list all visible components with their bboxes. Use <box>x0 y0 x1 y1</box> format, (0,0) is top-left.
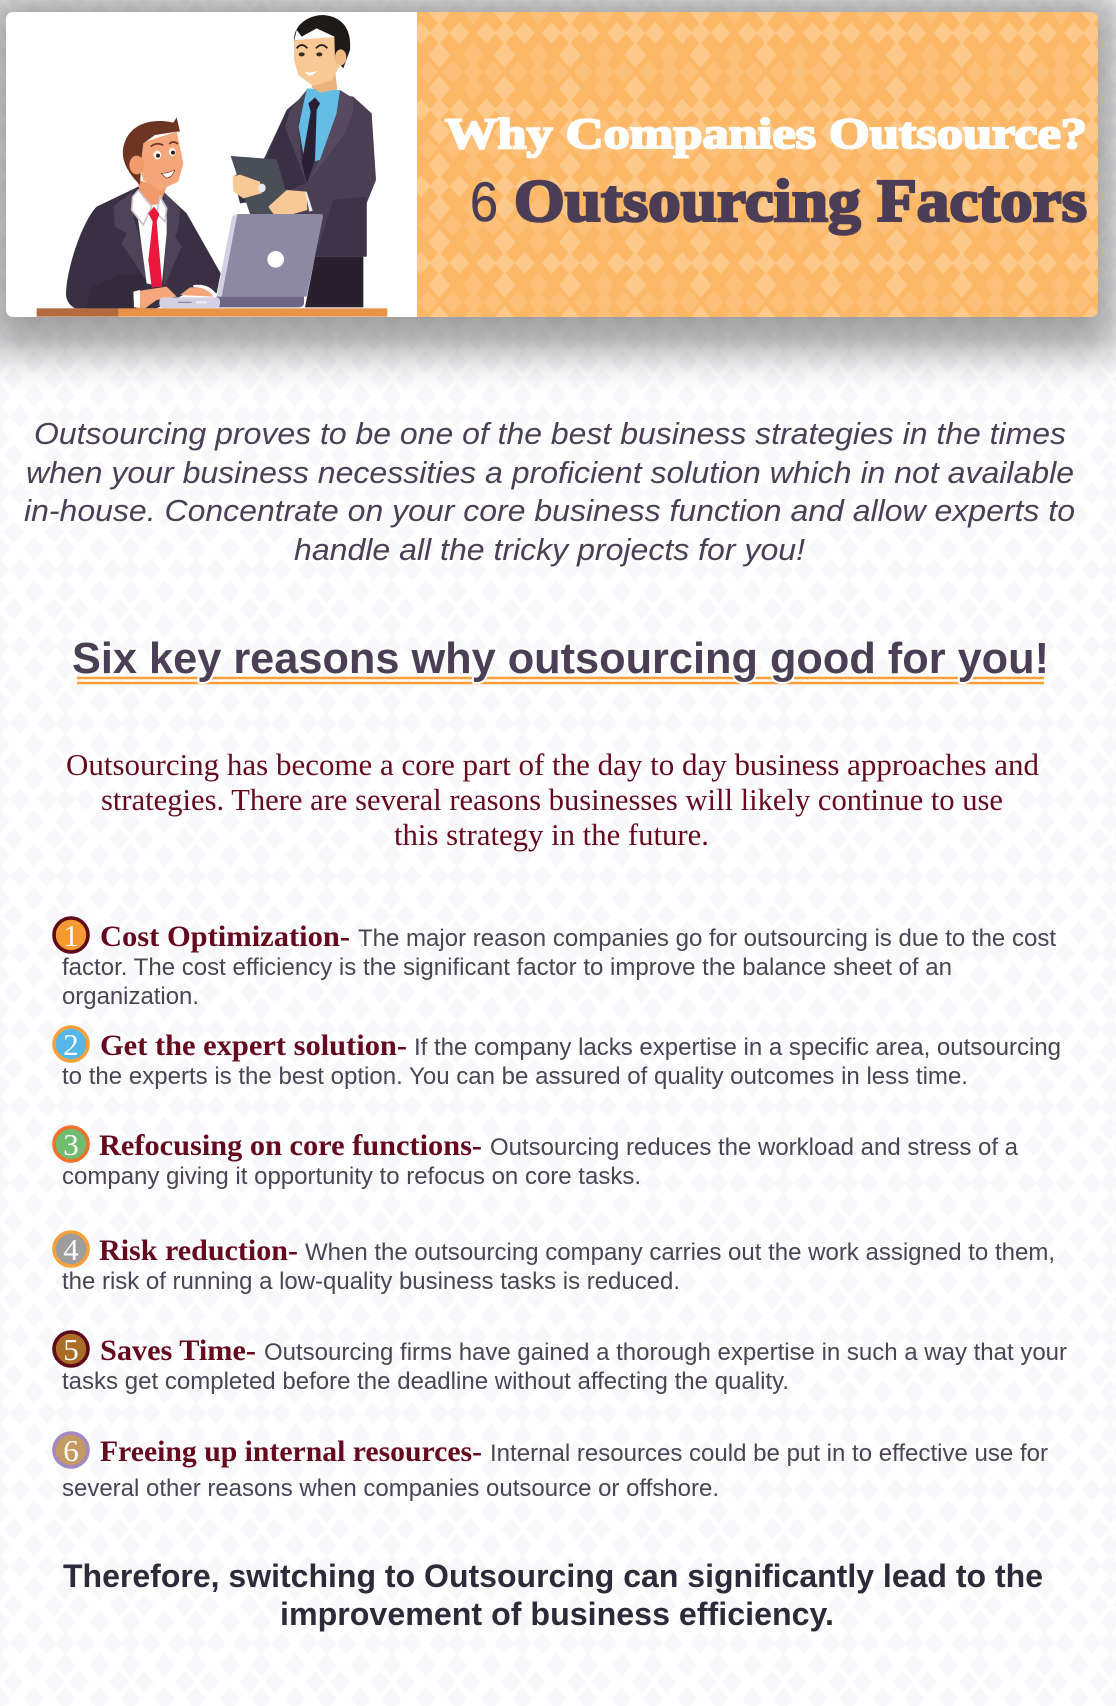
item 1: cost optimization: factor. The cost efficiency is the significant factor to improve the balance sheet of an <box>62 954 952 981</box>
intro paragraph: handle all the tricky projects for you! <box>294 532 805 567</box>
icon: number 3 <box>54 1127 88 1162</box>
icon: number 1: 1 <box>63 918 79 953</box>
item 4: risk reduction: the risk of running a low-quality business tasks is reduced. <box>62 1268 680 1295</box>
item 5: saves time <box>54 1332 1067 1395</box>
icon: number 5: 5 <box>63 1332 79 1367</box>
desk <box>37 308 387 317</box>
icon: number 4: 4 <box>63 1232 79 1267</box>
icon: number 4 <box>54 1232 88 1267</box>
item 1: cost optimization: Cost Optimization- <box>100 920 350 953</box>
icon: number 2: 2 <box>63 1027 79 1062</box>
header banner <box>6 12 1098 317</box>
item 1: cost optimization: The major reason companies go for outsourcing is due to the cost <box>358 925 1056 952</box>
item 2: expert solution: to the experts is the best option. You can be assured of quality outcomes in less time. <box>62 1063 968 1090</box>
icon: number 1 <box>54 918 88 953</box>
icon: number 3: 3 <box>63 1127 79 1162</box>
subheading paragraph: strategies. There are several reasons businesses will likely continue to use <box>101 782 1003 817</box>
item 3: refocusing: Outsourcing reduces the workload and stress of a <box>490 1134 1019 1161</box>
item 2: expert solution: Get the expert solution- <box>100 1029 407 1062</box>
icon: number 6 <box>54 1433 88 1468</box>
panel: orange title background <box>417 12 1098 317</box>
item 3: refocusing: Refocusing on core functions- <box>99 1129 482 1162</box>
item 2: expert solution: If the company lacks expertise in a specific area, outsourcing <box>414 1034 1061 1061</box>
subheading paragraph: this strategy in the future. <box>394 817 709 852</box>
tablet and hands <box>231 156 313 214</box>
item 2: expert solution <box>54 1027 1061 1090</box>
icon: number 5 <box>54 1332 88 1367</box>
item 5: saves time: tasks get completed before the deadline without affecting the quality. <box>62 1368 789 1395</box>
item 1: cost optimization <box>54 918 1056 1010</box>
item 5: saves time: Outsourcing firms have gained a thorough expertise in such a way that your <box>264 1339 1067 1366</box>
intro paragraph: Outsourcing proves to be one of the best business strategies in the times <box>34 416 1066 451</box>
intro paragraph: in-house. Concentrate on your core business function and allow experts to <box>24 493 1075 528</box>
item 5: saves time: Saves Time- <box>100 1334 256 1367</box>
title: 6 outsourcing factors: Outsourcing Factors <box>514 168 1087 234</box>
item 3: refocusing: company giving it opportunity to refocus on core tasks. <box>62 1163 641 1190</box>
seated man <box>66 117 221 308</box>
subheading paragraph: Outsourcing has become a core part of the day to day business approaches and <box>66 747 1039 782</box>
item 4: risk reduction: When the outsourcing company carries out the work assigned to them, <box>305 1239 1055 1266</box>
item 6: freeing up resources: Internal resources could be put in to effective use for <box>490 1440 1048 1467</box>
title: 6 outsourcing factors: 6 <box>470 170 498 233</box>
item 6: freeing up resources <box>54 1433 1048 1502</box>
title: why companies outsource: Why Companies Outsource? <box>445 111 1087 158</box>
item 6: freeing up resources: several other reasons when companies outsource or offshore. <box>62 1475 719 1502</box>
laptop <box>159 214 323 308</box>
conclusion: Therefore, switching to Outsourcing can significantly lead to the <box>63 1558 1043 1594</box>
intro paragraph <box>24 416 1075 567</box>
intro paragraph: when your business necessities a proficient solution which in not available <box>26 455 1074 490</box>
icon: number 6: 6 <box>63 1433 79 1468</box>
section heading with double underline: Six key reasons why outsourcing good for you! <box>72 634 1049 683</box>
standing man <box>233 15 376 307</box>
item 4: risk reduction <box>54 1232 1055 1295</box>
item 6: freeing up resources: Freeing up internal resources- <box>100 1435 482 1468</box>
panel: illustration background <box>6 12 417 317</box>
conclusion: improvement of business efficiency. <box>280 1596 834 1632</box>
item 4: risk reduction: Risk reduction- <box>99 1234 298 1267</box>
conclusion <box>63 1558 1043 1632</box>
card shadow <box>0 0 1116 352</box>
illustration: two businessmen at a laptop <box>37 15 387 317</box>
icon: number 2 <box>54 1027 88 1062</box>
item 3: refocusing <box>54 1127 1019 1190</box>
subheading paragraph <box>66 747 1039 852</box>
item 1: cost optimization: organization. <box>62 983 199 1010</box>
